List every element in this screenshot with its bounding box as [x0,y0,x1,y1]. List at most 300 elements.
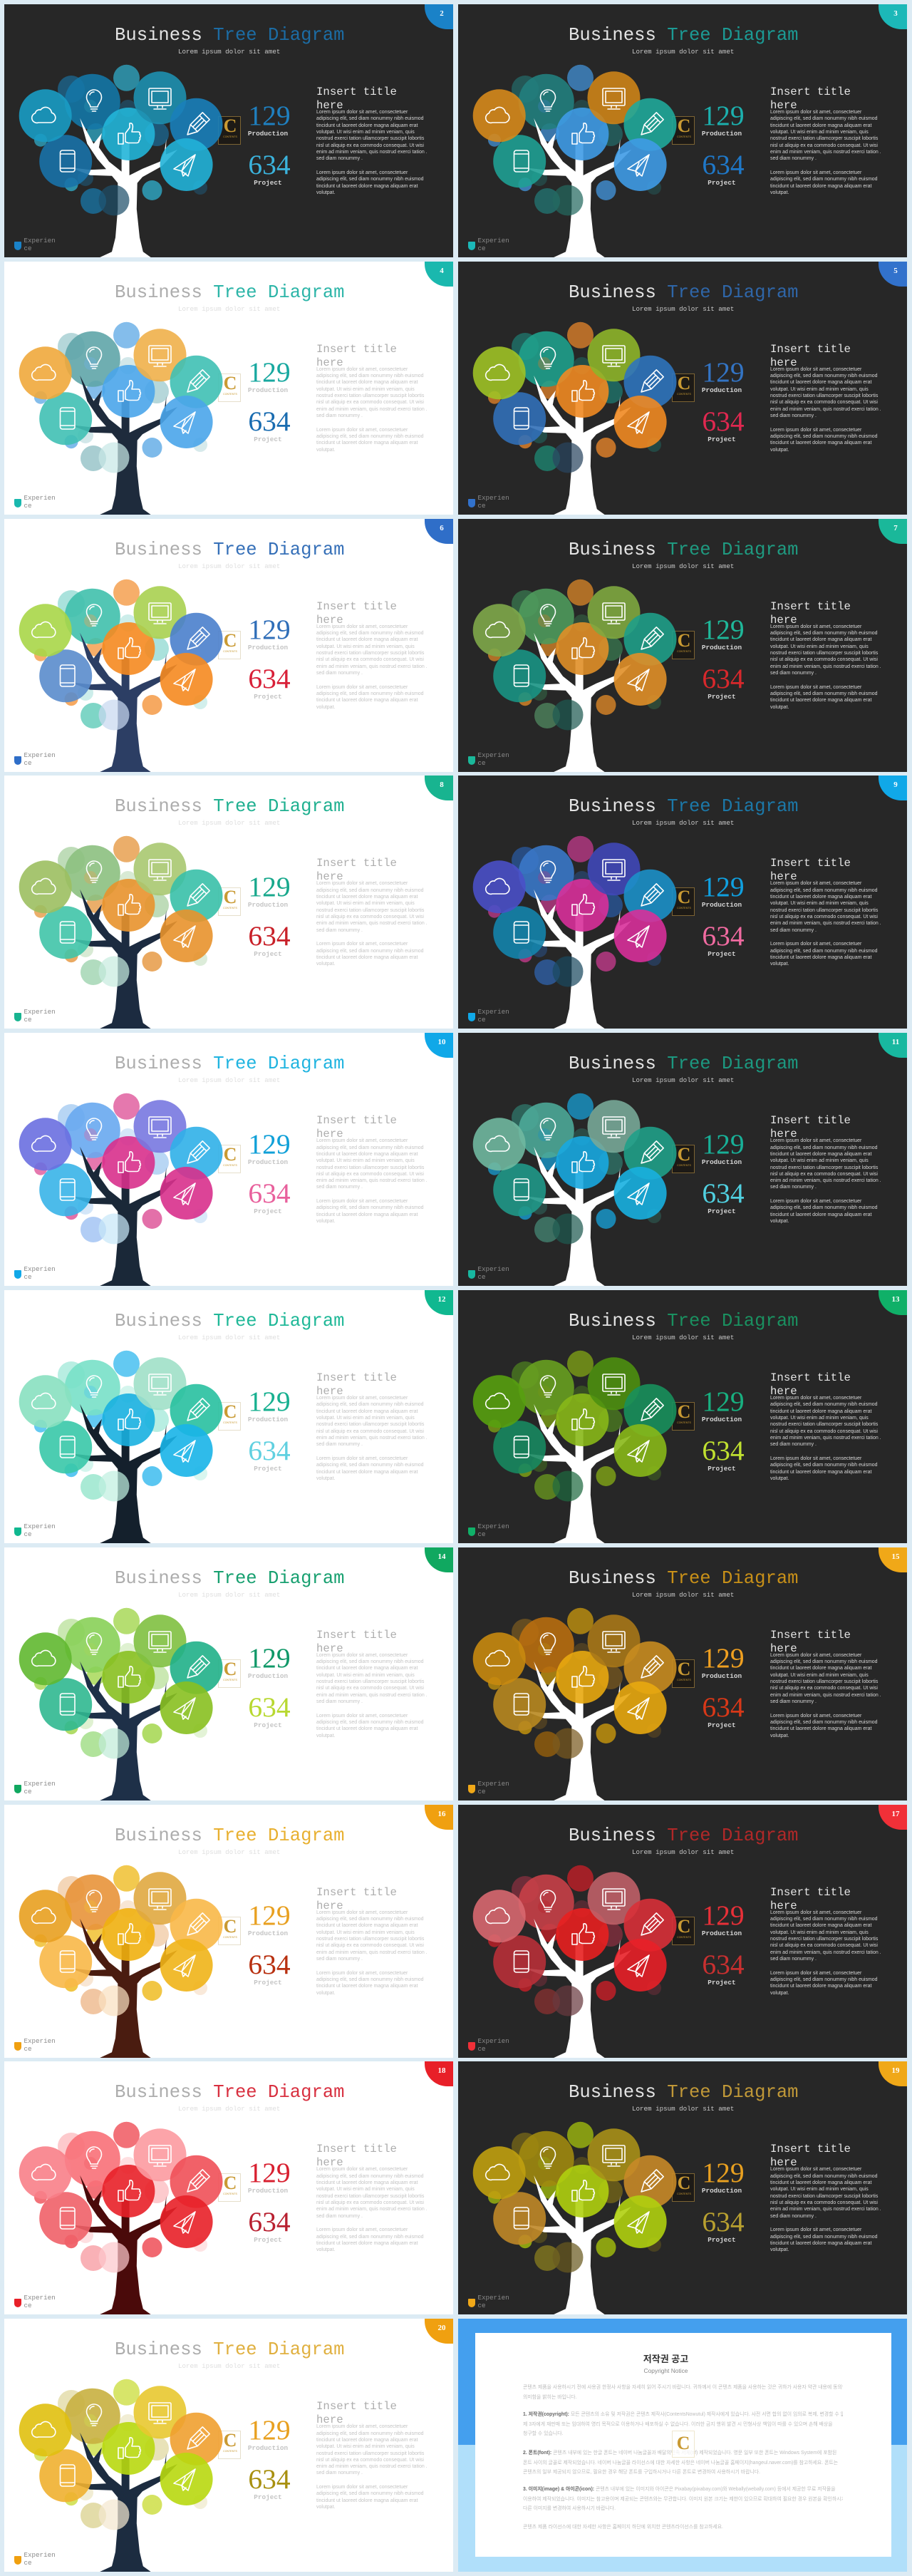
text heading: Insert title [770,1629,851,1642]
title: Business Tree Diagram [115,1311,345,1331]
slide 11 [458,1033,907,1286]
body text: sed diam nonummy . [770,413,817,418]
body text: volutpat. [316,1990,335,1996]
brand mark: Experien ce [24,2294,56,2309]
stat: production: 129 [248,1386,291,1417]
text heading: here [316,2413,343,2426]
title: Business Tree Diagram [569,1053,799,1074]
text heading [770,1114,851,1141]
page number tab: 16 [437,1810,446,1818]
body text: tincidunt ut laoreet dolore magna aliquam erat [770,441,871,445]
title: Business Tree Diagram [569,1825,799,1846]
notice section 1 [523,2410,843,2439]
stat: project: Project [708,179,736,187]
body text: enim ad minim veniam, quis nostrud exerci tation . [316,2207,428,2212]
text heading [316,600,397,627]
stat: production [239,1901,298,1938]
tree diagram [473,64,677,257]
stat: project [239,1179,298,1216]
body text: tincidunt ut laoreet dolore magna aliquam erat [770,2180,871,2185]
stat: project [693,1179,752,1216]
page number tab: 13 [892,1295,899,1304]
stat: production [239,2158,298,2195]
body text [770,624,895,718]
stat: production: Production [248,2187,288,2195]
body text: adipiscing elit, sed diam nonummy nibh euismod [770,1977,878,1982]
body text: adipiscing elit, sed diam nonummy nibh euismod [316,2491,424,2496]
body text: Lorem ipsum dolor sit amet, consectetuer [770,942,861,947]
stat: production [239,1387,298,1424]
stat: production: 129 [702,1900,745,1931]
stat: production: Production [248,1930,288,1937]
body text: Lorem ipsum dolor sit amet, consectetuer [316,2167,408,2172]
tree diagram [458,1290,700,1543]
page number tab: 12 [437,1295,446,1304]
body text: tincidunt ut laoreet dolore magna aliquam erat [770,1212,871,1217]
body text: nisl ut aliquip ex ea commodo consequat. Ut wisi [316,143,424,148]
body text: volutpat. Ut wisi enim ad minim veniam, quis [316,1416,415,1421]
stat: production [693,872,752,910]
text heading: Insert title [316,1886,397,1899]
tree diagram [473,322,677,515]
body text: tincidunt ut laoreet dolore magna aliquam erat [770,698,871,703]
logo badge [672,2173,695,2202]
body text [316,1652,441,1746]
body text: Lorem ipsum dolor sit amet, consectetuer [316,624,408,629]
brand mark: Experien ce [477,1008,509,1024]
stat: project [693,2207,752,2245]
brand mark: Experien ce [477,751,509,767]
body text: adipiscing elit, sed diam nonummy nibh euismod [316,1917,424,1922]
brand mark [468,1265,511,1282]
text heading: here [316,2156,343,2169]
body text: nostrud exerci tation ullamcorper suscipit lobortis [770,136,878,141]
text heading: Insert title [770,343,851,356]
page number tab: 8 [440,780,444,789]
tree diagram [4,1547,247,1800]
body text: Lorem ipsum dolor sit amet, consectetuer [770,1714,861,1719]
body text: nostrud exerci tation ullamcorper suscipit lobortis [316,1165,424,1170]
brand mark: Experien ce [477,2037,509,2053]
title: Business Tree Diagram [569,282,799,303]
body text: adipiscing elit, sed diam nonummy nibh euismod [770,888,878,893]
stat: project: 634 [248,920,291,952]
body text: tincidunt ut laoreet dolore magna aliquam erat [770,1726,871,1731]
tree diagram [4,1290,247,1543]
logo badge: C [678,1659,690,1679]
stat: project: Project [254,1207,282,1215]
body text: enim ad minim veniam, quis nostrud exerci tation . [316,664,428,669]
body text: sed diam nonummy . [316,928,363,933]
title: Business Tree Diagram [115,1568,345,1589]
body text: nostrud exerci tation ullamcorper suscipit lobortis [770,1679,878,1684]
body text: nostrud exerci tation ullamcorper suscipit lobortis [770,2194,878,2199]
body text: Lorem ipsum dolor sit amet, consectetuer [316,1910,408,1915]
body text: adipiscing elit, sed diam nonummy nibh euismod [770,691,878,696]
brand mark: Experien ce [477,1780,509,1796]
body text: volutpat. [316,962,335,967]
body text: nisl ut aliquip ex ea commodo consequat. Ut wisi [770,2200,878,2205]
brand mark: Experien ce [24,1780,56,1796]
slide 5 [458,262,907,515]
title: Business Tree Diagram [569,2082,799,2103]
body text: volutpat. Ut wisi enim ad minim veniam, quis [770,1158,869,1163]
body text: nostrud exerci tation ullamcorper suscipit lobortis [770,1937,878,1942]
body text: Lorem ipsum dolor sit amet, consectetuer [316,367,408,372]
body text: adipiscing elit, sed diam nonummy nibh euismod [316,1720,424,1725]
body text: sed diam nonummy . [770,671,817,676]
body text: Lorem ipsum dolor sit amet, consectetuer [316,1714,408,1719]
logo badge: CONTENTS [223,907,237,910]
title: Business Tree Diagram [115,2339,345,2360]
body text: tincidunt ut laoreet dolore magna aliquam erat [770,2241,871,2246]
text heading: here [316,1385,343,1398]
subtitle: Lorem ipsum dolor sit amet [178,305,280,313]
body text: tincidunt ut laoreet dolore magna aliquam erat [770,123,871,128]
body text: tincidunt ut laoreet dolore magna aliquam erat [316,380,418,385]
notice subtitle: Copyright Notice [644,2367,688,2374]
title: Business Tree Diagram [569,25,799,46]
brand mark: Experien ce [24,1523,56,1538]
body text: adipiscing elit, sed diam nonummy nibh euismod [770,373,878,378]
text heading [770,1371,851,1398]
title: Business Tree Diagram [569,1568,799,1589]
body text: adipiscing elit, sed diam nonummy nibh euismod [316,691,424,696]
text heading [316,2143,397,2170]
text heading: here [770,1642,797,1655]
page number tab [425,1033,453,1058]
slide 19 [458,2061,907,2314]
page number tab [879,1547,907,1572]
brand mark: Experien ce [477,494,509,510]
logo badge: C [224,373,237,393]
body text: enim ad minim veniam, quis nostrud exerci tation . [316,1178,428,1183]
stat: project: 634 [248,663,291,694]
page number tab: 2 [440,9,444,18]
body text: Lorem ipsum dolor sit amet, consectetuer [770,2167,861,2172]
body text: adipiscing elit, sed diam nonummy nibh euismod [316,373,424,378]
body text: Lorem ipsum dolor sit amet, consectetuer [770,170,861,175]
logo badge: CONTENTS [223,1421,237,1424]
notice section 3: 3. 이미지(image) & 아이콘(icon): 콘텐츠 내부에 있는 이미지와 아이콘은 Pixabay(pixabay.com)와 Webally(webally.com) 등에서 제공한 무료 저작물을 [523,2487,836,2492]
stat: production: 129 [248,1900,291,1931]
slide 9 [458,776,907,1029]
stat: project [693,1950,752,1987]
stat: production: 129 [702,614,745,645]
body text: nisl ut aliquip ex ea commodo consequat. Ut wisi [316,400,424,405]
subtitle: Lorem ipsum dolor sit amet [632,2105,734,2113]
text heading: Insert title [316,1114,397,1127]
body text: tincidunt ut laoreet dolore magna aliquam erat [770,1152,871,1157]
body text: volutpat. [770,1476,789,1481]
logo badge [218,887,241,916]
text heading: Insert title [316,2143,397,2155]
stat: project [239,1950,298,1987]
stat: production: 129 [248,871,291,902]
body text: nisl ut aliquip ex ea commodo consequat. Ut wisi [770,1429,878,1434]
body text: enim ad minim veniam, quis nostrud exerci tation . [770,1950,881,1955]
logo badge: CONTENTS [677,135,691,138]
body text [770,110,881,195]
stat: production [693,1901,752,1938]
stat: production: Production [702,386,742,394]
notice footer line: 콘텐츠 제품 라이선스에 대한 자세한 사항은 홈페이지 하단에 위치한 콘텐츠라이선스를 참고하세요. [523,2525,723,2530]
page number tab [425,1290,453,1315]
body text: volutpat. Ut wisi enim ad minim veniam, quis [316,1930,415,1935]
body text: adipiscing elit, sed diam nonummy nibh euismod [770,1659,878,1664]
body text: adipiscing elit, sed diam nonummy nibh euismod [770,1205,878,1210]
logo badge: CONTENTS [223,650,237,653]
page number tab [425,2061,453,2086]
logo badge [218,1659,241,1688]
subtitle: Lorem ipsum dolor sit amet [178,1591,280,1599]
page number tab: 5 [893,267,898,275]
body text: sed diam nonummy . [770,1442,817,1447]
stat: project: 634 [248,1435,291,1466]
logo badge [218,2173,241,2202]
stat: production: Production [248,130,288,138]
text heading: here [770,1128,797,1140]
slide 10 [4,1033,453,1286]
body text: tincidunt ut laoreet dolore magna aliquam erat [316,2498,418,2503]
body text: enim ad minim veniam, quis nostrud exerci tation . [770,1436,881,1441]
tree diagram [458,2061,700,2314]
body text: Lorem ipsum dolor sit amet, consectetuer [770,1138,861,1143]
page number tab [425,262,453,287]
stat: project: 634 [702,406,745,437]
brand mark [14,1265,57,1282]
body text: tincidunt ut laoreet dolore magna aliquam erat [316,1152,418,1157]
logo badge: C [224,630,237,651]
body text: nostrud exerci tation ullamcorper suscipit lobortis [316,908,424,913]
body text: enim ad minim veniam, quis nostrud exerci tation . [316,407,428,412]
stat: project: Project [708,1979,736,1987]
text heading: here [316,356,343,369]
logo badge: CONTENTS [677,907,691,910]
stat: project: Project [254,1465,282,1473]
page number tab: 9 [893,780,898,789]
body text: adipiscing elit, sed diam nonummy nibh euismod [316,1977,424,1982]
stat: production: 129 [248,1642,291,1674]
body text: tincidunt ut laoreet dolore magna aliquam erat [316,1666,418,1671]
body text: tincidunt ut laoreet dolore magna aliquam erat [316,955,418,960]
logo badge [218,1402,241,1431]
logo badge: C [678,2173,690,2193]
logo badge: CONTENTS [677,650,691,653]
text heading: Insert title [770,1886,851,1899]
logo badge: CONTENTS [223,2450,237,2453]
logo badge [672,1659,695,1688]
logo badge: CONTENTS [677,1936,691,1939]
text heading [316,1371,397,1398]
body text: tincidunt ut laoreet dolore magna aliquam erat [316,2241,418,2246]
subtitle: Lorem ipsum dolor sit amet [178,1334,280,1341]
body text: tincidunt ut laoreet dolore magna aliquam erat [770,637,871,642]
text heading: here [316,1128,343,1140]
logo badge: CONTENTS [677,1421,691,1424]
body text: Lorem ipsum dolor sit amet, consectetuer [770,1456,861,1461]
body text: adipiscing elit, sed diam nonummy nibh euismod [316,1463,424,1468]
brand mark [468,751,511,768]
body text: volutpat. Ut wisi enim ad minim veniam, quis [770,2187,869,2192]
logo badge: C [678,1401,690,1422]
body text [770,366,881,453]
body text: tincidunt ut laoreet dolore magna aliquam erat [770,1666,871,1671]
stat: project: 634 [702,1178,745,1209]
notice white panel [475,2333,891,2557]
brand mark: Experien ce [24,751,56,767]
body text: tincidunt ut laoreet dolore magna aliquam erat [316,1470,418,1475]
body text: Lorem ipsum dolor sit amet, consectetuer [316,1971,408,1976]
stat: project: 634 [248,149,291,180]
stat: project: Project [708,1721,736,1729]
text heading: Insert title [770,86,851,98]
logo badge [672,631,695,659]
body text: Lorem ipsum dolor sit amet, consectetuer [770,881,861,886]
body text: Lorem ipsum dolor sit amet, consectetuer [316,1396,408,1401]
text heading [770,2143,851,2170]
notice intro [523,2383,843,2402]
text heading: here [770,356,797,369]
page number tab: 7 [893,524,898,532]
stat: production [693,1130,752,1167]
body text: nisl ut aliquip ex ea commodo consequat. Ut wisi [770,1172,878,1177]
body text: nostrud exerci tation ullamcorper suscipit lobortis [316,2451,424,2456]
body text: sed diam nonummy . [316,1957,363,1962]
text heading [770,86,851,112]
subtitle: Lorem ipsum dolor sit amet [632,1076,734,1084]
stat: project: 634 [248,2463,291,2495]
slide 15 [458,1547,907,1800]
body text: adipiscing elit, sed diam nonummy nibh euismod [316,631,424,636]
text heading: Insert title [770,857,851,870]
stat: production: 129 [702,871,745,902]
page number tab [425,2319,453,2344]
body text: nisl ut aliquip ex ea commodo consequat. Ut wisi [770,657,878,662]
text heading [770,1886,851,1913]
title: Business Tree Diagram [115,1053,345,1074]
page number tab: 18 [437,2066,446,2075]
stat: project: Project [254,1721,282,1729]
text heading: Insert title [316,1629,397,1642]
body text: tincidunt ut laoreet dolore magna aliquam erat [316,2438,418,2443]
slide 17 [458,1805,907,2058]
tree diagram [4,2319,247,2572]
body text: volutpat. [316,2505,335,2510]
notice section 2: 폰트 사이의 글꼴로 제작되었습니다. 네이버 나눔글꼴 라이선스에 대한 자세한 사항은 네이버 나눔글꼴 홈페이지(hangeul.naver.com)를 참고하세요. 폰트는 [523,2461,838,2466]
body text: nostrud exerci tation ullamcorper suscipit lobortis [316,1937,424,1942]
body text [316,2166,441,2261]
body text: nisl ut aliquip ex ea commodo consequat. Ut wisi [316,2200,424,2205]
body text: volutpat. Ut wisi enim ad minim veniam, quis [316,901,415,906]
subtitle: Lorem ipsum dolor sit amet [632,305,734,313]
stat: project: Project [708,950,736,958]
logo badge: C [224,2173,237,2193]
stat: project [693,1436,752,1473]
notice section 1: 청구할 수 있습니다. [523,2431,563,2436]
stat: production: 129 [248,614,291,645]
brand mark: Experien ce [24,2037,56,2053]
body text [770,2166,895,2261]
page number tab [879,1033,907,1058]
body text: enim ad minim veniam, quis nostrud exerci tation . [770,921,881,926]
body text: adipiscing elit, sed diam nonummy nibh euismod [770,177,878,182]
stat: project: 634 [702,663,745,694]
stat: production: 129 [702,2157,745,2188]
stat: project: Project [708,693,736,701]
stat: production: Production [702,2187,742,2195]
stat: project: Project [708,1207,736,1215]
brand mark [468,2037,511,2054]
stat: production: 129 [248,2157,291,2188]
body text: nostrud exerci tation ullamcorper suscipit lobortis [316,651,424,656]
text heading: Insert title [770,1114,851,1127]
body text: nostrud exerci tation ullamcorper suscipit lobortis [316,1679,424,1684]
slide 13 [458,1290,907,1543]
logo badge: CONTENTS [677,1164,691,1167]
logo badge: C [224,2430,237,2451]
body text [316,1138,441,1232]
body text: volutpat. Ut wisi enim ad minim veniam, quis [770,901,869,906]
logo badge: C [224,1659,237,1679]
body text: sed diam nonummy . [316,1442,363,1447]
body text: Lorem ipsum dolor sit amet, consectetuer [316,685,408,690]
body text: adipiscing elit, sed diam nonummy nibh euismod [316,177,424,182]
body text: Lorem ipsum dolor sit amet, consectetuer [770,1910,861,1915]
body text: sed diam nonummy . [316,671,363,676]
logo badge: C [678,887,690,907]
stat: project: Project [708,2236,736,2244]
body text: volutpat. Ut wisi enim ad minim veniam, quis [770,644,869,649]
slide 7 [458,519,907,772]
stat: project: Project [254,2493,282,2501]
stat: project [239,1693,298,1730]
brand mark: Experien ce [24,2551,56,2567]
body text: volutpat. Ut wisi enim ad minim veniam, quis [316,387,415,392]
page number tab [879,2061,907,2086]
stat: project: Project [254,1979,282,1987]
slide 3 [458,4,907,257]
text heading: here [316,99,343,112]
body text: adipiscing elit, sed diam nonummy nibh euismod [770,2235,878,2240]
stat: project: 634 [702,920,745,952]
body text: volutpat. [770,1990,789,1996]
logo badge [218,116,241,145]
subtitle: Lorem ipsum dolor sit amet [632,48,734,56]
body text: enim ad minim veniam, quis nostrud exerci tation . [770,1178,881,1183]
brand mark: Experien ce [477,1523,509,1538]
body text: adipiscing elit, sed diam nonummy nibh euismod [770,1720,878,1725]
stat: project: 634 [702,1435,745,1466]
page number tab [425,1805,453,1830]
logo badge: CONTENTS [223,1164,237,1167]
body text: Lorem ipsum dolor sit amet, consectetuer [316,1653,408,1658]
body text: volutpat. Ut wisi enim ad minim veniam, quis [316,644,415,649]
stat: production: 129 [702,100,745,131]
slide 14 [4,1547,453,1800]
slide 4 [4,262,453,515]
page number tab [879,776,907,800]
body text: Lorem ipsum dolor sit amet, consectetuer [316,1456,408,1461]
stat: project [693,1693,752,1730]
body text: adipiscing elit, sed diam nonummy nibh euismod [316,2174,424,2179]
body text: adipiscing elit, sed diam nonummy nibh euismod [770,2174,878,2179]
notice section 1: 제 3자에게 재판매 또는 임대하여 영리 목적으로 이용하거나 배포하실 수 없습니다. 이러한 금지 행위 발견 시 민형사상 책임이 따를 수 있으며 손해 배상을 [523,2422,833,2427]
brand mark: Experien ce [24,1008,56,1024]
body text: tincidunt ut laoreet dolore magna aliquam erat [316,2180,418,2185]
body text: nisl ut aliquip ex ea commodo consequat. Ut wisi [316,1429,424,1434]
brand mark [468,1780,511,1797]
